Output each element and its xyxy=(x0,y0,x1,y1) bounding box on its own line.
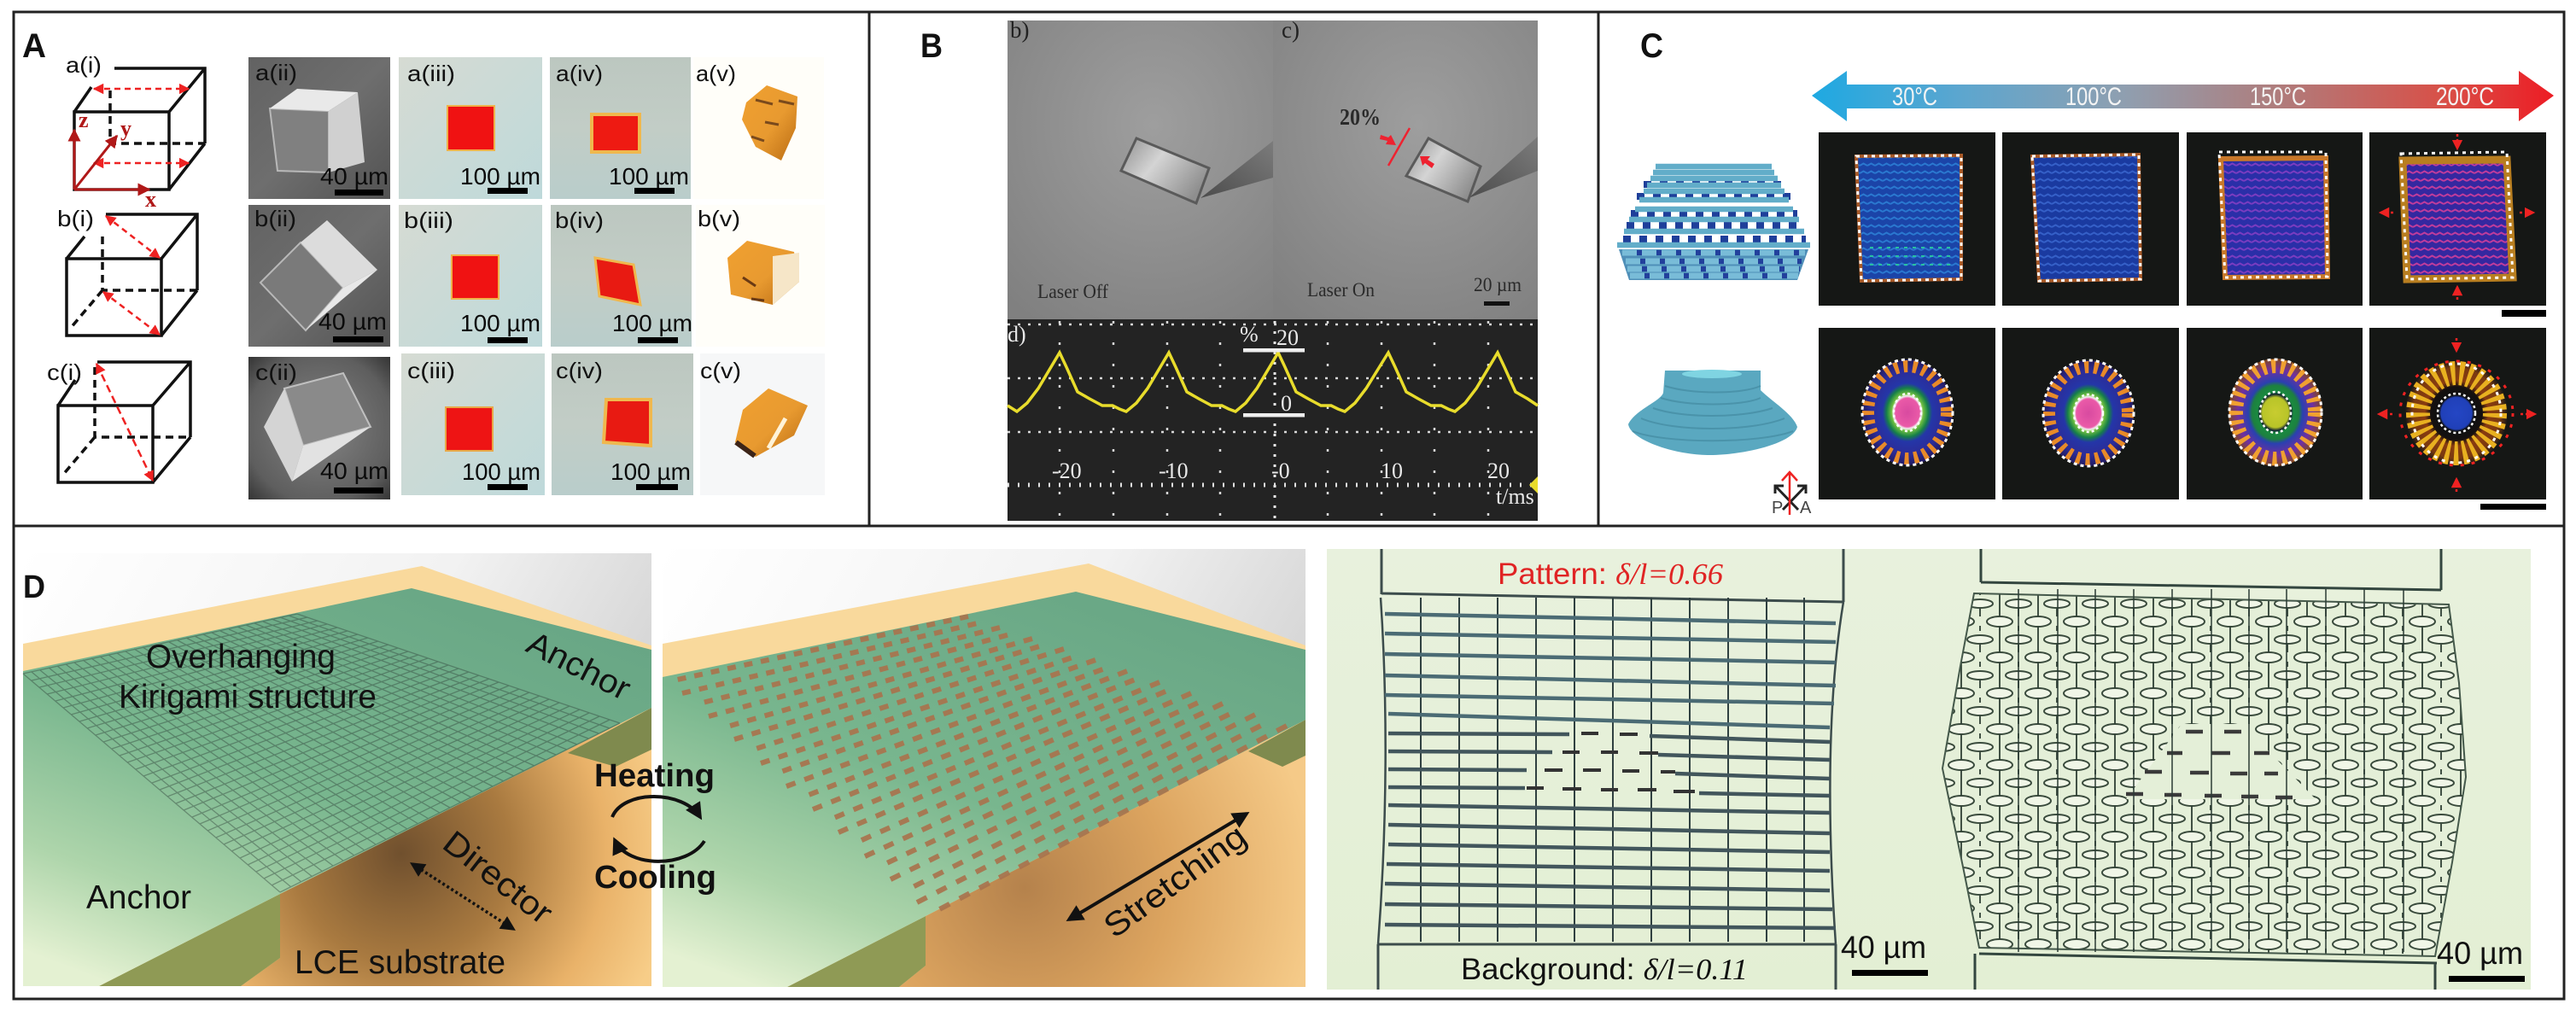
render: closed kirigami on LCE substrate: Kirigami structure xyxy=(119,679,377,715)
micrograph b(ii) xyxy=(248,205,390,347)
micrograph a(iv): 100 µm xyxy=(609,163,689,190)
icon: polarizer and analyzer: P xyxy=(1772,499,1783,517)
optical image: disk 30C xyxy=(1819,328,1995,499)
kirigami grid xyxy=(23,614,620,892)
scale bar row 1 xyxy=(2502,310,2546,317)
crystal photo b(v) xyxy=(696,205,825,347)
oscilloscope chart d: -20 xyxy=(1052,458,1082,483)
optical image: disk 100C xyxy=(2002,328,2179,499)
oscilloscope chart d: -10 xyxy=(1159,458,1189,483)
micrograph c(iv) xyxy=(552,353,693,495)
scale bar right: 40 µm xyxy=(2437,936,2523,971)
micrograph c(ii): 40 µm xyxy=(320,458,388,484)
micrograph a(iii): a(iii) xyxy=(407,61,455,86)
oscilloscope chart d: t/ms xyxy=(1496,484,1534,509)
heading A: A xyxy=(22,27,46,65)
label: background value: Background: δ/l=0.11 xyxy=(1461,953,1748,986)
micrograph c: laser on: Laser On xyxy=(1307,279,1375,301)
micrograph: undeformed lattice xyxy=(1378,549,1843,990)
oscilloscope chart d xyxy=(1008,319,1538,521)
scale bar left: 40 µm xyxy=(1841,930,1926,965)
heading B: B xyxy=(920,27,943,65)
micrograph a(iv) xyxy=(550,57,691,199)
micrograph c: laser on: 20 µm xyxy=(1474,274,1522,295)
micrograph b(iv): b(iv) xyxy=(555,207,604,233)
micrograph c: laser on: 20% xyxy=(1340,104,1381,130)
micrograph b: laser off xyxy=(1008,17,1273,319)
diagram: cube b(i): b(i) xyxy=(57,206,94,231)
crystal photo c(v): c(v) xyxy=(700,358,741,383)
micrograph c: laser on xyxy=(1273,17,1538,319)
crystal photo b(v): b(v) xyxy=(698,206,740,231)
micrograph a(iv): a(iv) xyxy=(556,61,603,86)
panel A: crystal geometries xyxy=(22,27,825,499)
render: closed kirigami on LCE substrate: Anchor xyxy=(86,879,191,916)
micrograph a(iii) xyxy=(399,57,542,199)
optical image: lattice 200C xyxy=(2369,132,2546,306)
render: stretched kirigami on LCE substrate xyxy=(663,549,1306,987)
micrograph a(ii) xyxy=(248,57,390,199)
optical image: lattice 30C xyxy=(1819,132,1995,306)
micrograph c(iii): c(iii) xyxy=(407,358,455,383)
render: closed kirigami on LCE substrate: Anchor xyxy=(521,625,636,708)
optical image: lattice 100C xyxy=(2002,132,2179,306)
diagram: cube a(i): a(i) xyxy=(66,52,102,78)
optical image: lattice 150C xyxy=(2187,132,2363,306)
oscilloscope chart d: -0 xyxy=(1271,458,1290,483)
micrograph c(ii): c(ii) xyxy=(255,359,297,385)
oscilloscope chart d: 10 xyxy=(1381,458,1403,483)
crystal photo a(v): a(v) xyxy=(696,61,736,86)
icon: polarizer and analyzer xyxy=(1772,472,1812,517)
temperature arrow xyxy=(1812,71,2554,121)
render: closed kirigami on LCE substrate: Overhanging xyxy=(146,639,336,675)
render: closed kirigami on LCE substrate: Director xyxy=(435,824,559,931)
label and arrows: heating and cooling: Heating xyxy=(594,758,715,794)
micrograph c: laser on: c) xyxy=(1282,17,1300,43)
micrograph a(ii): 40 µm xyxy=(320,163,388,190)
stretched kirigami lattice xyxy=(669,616,1287,914)
label: pattern value: Pattern: δ/l=0.66 xyxy=(1498,558,1724,591)
oscilloscope chart d: % xyxy=(1240,322,1259,347)
oscilloscope chart d: 20 xyxy=(1276,325,1299,350)
panel B: laser-driven crystal xyxy=(920,17,1538,521)
micrograph b(iii) xyxy=(399,205,542,347)
optical image: disk 150C xyxy=(2187,328,2363,499)
diagram: cube a(i) xyxy=(66,52,205,212)
micrograph c(ii) xyxy=(248,357,390,499)
icon: polarizer and analyzer: A xyxy=(1800,499,1812,517)
diagram: cube a(i): z xyxy=(79,108,89,132)
temperature arrow: 150°C xyxy=(2250,83,2306,111)
crystal photo c(v) xyxy=(700,353,825,495)
micrograph: stretched lattice xyxy=(1942,549,2466,990)
micrograph c(iv): c(iv) xyxy=(556,358,603,383)
temperature arrow: 200°C xyxy=(2436,83,2494,111)
micrograph c(iii): 100 µm xyxy=(462,458,540,485)
micrograph c(iv): 100 µm xyxy=(610,458,691,485)
panel D: kirigami xyxy=(23,549,2531,990)
micrograph b: laser off: b) xyxy=(1010,17,1030,43)
micrograph a(ii): a(ii) xyxy=(255,60,297,85)
trace: strain signal xyxy=(1008,353,1538,412)
oscilloscope chart d: 0 xyxy=(1281,391,1292,416)
oscilloscope chart d: 20 xyxy=(1487,458,1510,483)
micrograph a(iii): 100 µm xyxy=(460,163,540,190)
micrograph b(ii): 40 µm xyxy=(318,308,387,335)
diagram: cube c(i) xyxy=(47,359,190,482)
micrograph b(iv): 100 µm xyxy=(612,310,692,336)
white gap between renders xyxy=(651,549,663,987)
micrograph c(iii) xyxy=(401,353,545,495)
micrograph b: laser off: Laser Off xyxy=(1037,281,1108,302)
micrograph b(iii): 100 µm xyxy=(460,310,540,336)
diagram: cube c(i): c(i) xyxy=(47,359,82,385)
diagram: cube a(i): x xyxy=(145,187,156,212)
render: closed kirigami on LCE substrate: LCE substrate xyxy=(295,944,505,981)
temperature arrow: 30°C xyxy=(1892,83,1937,111)
optical image: disk 200C xyxy=(2369,328,2546,499)
micrograph b(iii): b(iii) xyxy=(404,207,453,233)
3D model: cone xyxy=(1628,370,1797,455)
label and arrows: heating and cooling: Cooling xyxy=(594,860,716,896)
temperature arrow: 100°C xyxy=(2065,83,2122,111)
micrograph b(ii): b(ii) xyxy=(254,206,296,231)
3D model: lattice xyxy=(1617,166,1810,280)
diagram: cube a(i): y xyxy=(120,116,131,141)
render: closed kirigami on LCE substrate xyxy=(23,553,651,986)
scale bar row 2 xyxy=(2480,504,2546,510)
render: stretched kirigami on LCE substrate: Stretching xyxy=(1097,818,1253,945)
micrograph: kirigami pattern backgrounds xyxy=(1327,549,2531,990)
heading C: C xyxy=(1640,27,1663,65)
heading D: D xyxy=(23,569,45,605)
micrograph b(iv) xyxy=(551,205,692,347)
diagram: cube b(i) xyxy=(57,206,197,336)
crystal photo a(v) xyxy=(693,57,824,199)
panel C: thermal response xyxy=(1617,27,2554,517)
label and arrows: heating and cooling xyxy=(594,758,716,896)
oscilloscope chart d: d) xyxy=(1008,322,1026,347)
